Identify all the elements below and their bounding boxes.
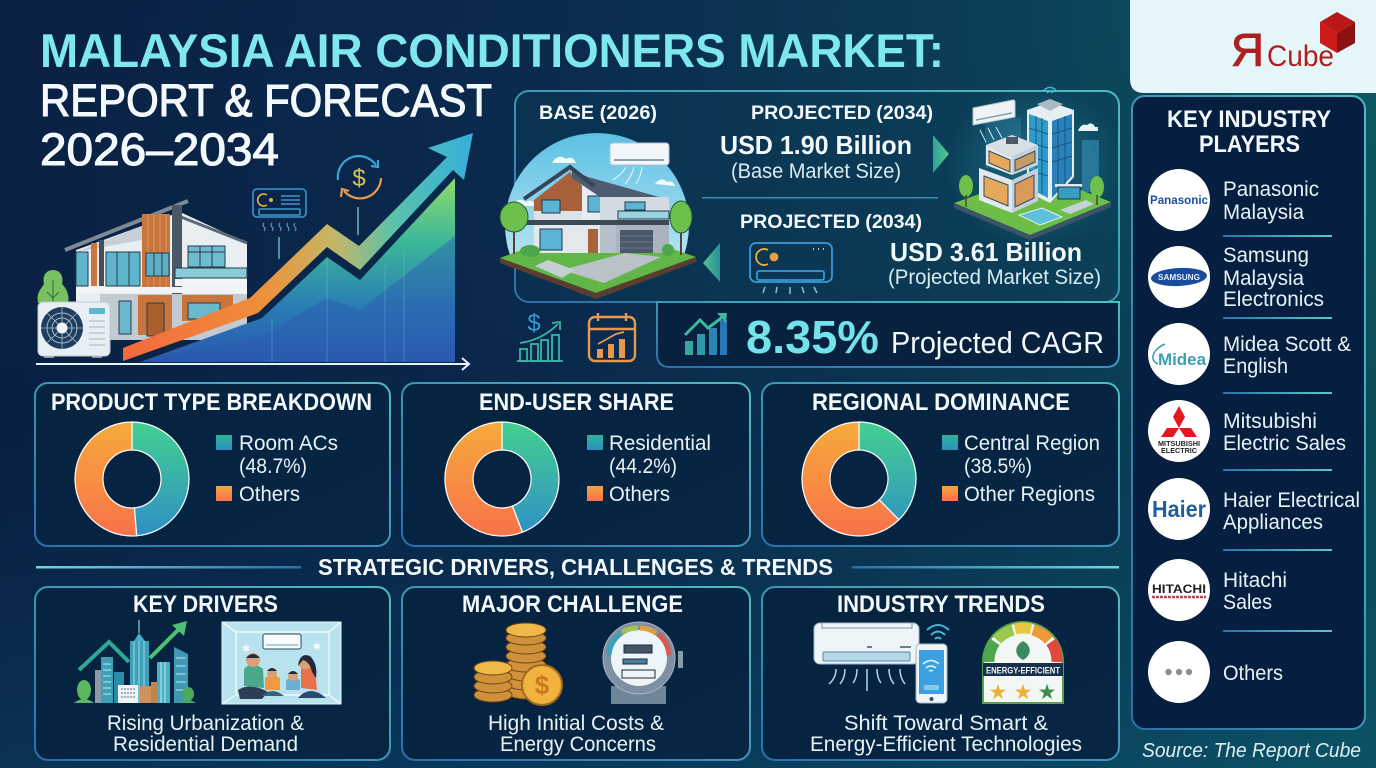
caption: High Initial Costs & — [488, 712, 664, 735]
caption: Energy Concerns — [500, 733, 656, 756]
player: Samsung — [1148, 244, 1324, 311]
player: Midea — [1148, 323, 1351, 385]
player: Samsung: Malaysia — [1223, 267, 1304, 290]
arrow left — [703, 243, 720, 282]
panel heading: KEY INDUSTRY — [1167, 106, 1331, 133]
player: Hitachi: Sales — [1223, 591, 1272, 614]
icon: wifi — [927, 625, 949, 639]
caption: Shift Toward Smart & — [844, 712, 1048, 735]
legend — [587, 432, 711, 506]
panel: end-user share: END-USER SHARE — [479, 389, 674, 416]
icon: house — [65, 201, 247, 340]
player: Mitsubishi: MITSUBISHI — [1158, 441, 1200, 448]
growth illustration: house and rising chart — [36, 133, 473, 370]
axis — [36, 358, 469, 370]
icon: energy efficiency badge — [983, 622, 1063, 704]
caption — [107, 712, 304, 756]
legend: Room ACs — [239, 432, 338, 455]
donut chart — [445, 422, 559, 536]
icon: calendar chart — [589, 313, 635, 361]
caption: Rising Urbanization & — [107, 712, 304, 735]
legend: (44.2%) — [609, 455, 677, 478]
CAGR label: Projected CAGR — [891, 325, 1104, 360]
legend — [942, 432, 1100, 506]
panel: key drivers: KEY DRIVERS — [133, 591, 278, 618]
panel: end-user share — [402, 383, 750, 546]
logo text: Cube — [1267, 40, 1334, 73]
icon: wall AC — [610, 143, 669, 184]
logo text: Я — [1231, 24, 1264, 76]
player: Panasonic: Panasonic — [1223, 178, 1319, 201]
player: Others: Others — [1223, 662, 1283, 685]
title: 2026–2034 — [40, 124, 279, 175]
icon: revenue growth — [517, 310, 563, 361]
caption: Residential Demand — [113, 733, 298, 756]
legend: Other Regions — [964, 483, 1095, 506]
player: Panasonic — [1148, 169, 1319, 231]
icon: AC unit — [750, 243, 832, 294]
player: Panasonic: Malaysia — [1223, 201, 1304, 224]
legend: (48.7%) — [239, 455, 307, 478]
player: Hitachi: Hitachi — [1223, 569, 1287, 592]
player: Mitsubishi: Electric Sales — [1223, 432, 1346, 455]
panel: industry trends — [762, 587, 1119, 760]
arrow right — [933, 135, 949, 173]
player: Haier: Appliances — [1223, 511, 1323, 534]
panel: product type breakdown: PRODUCT TYPE BREAKDOWN — [51, 389, 372, 416]
player: Hitachi: HITACHI — [1152, 584, 1206, 596]
icon: coin stacks — [474, 623, 562, 705]
section heading: STRATEGIC DRIVERS, CHALLENGES & TRENDS — [318, 554, 833, 580]
panel heading — [1167, 106, 1331, 158]
icon: energy efficiency badge: ENERGY-EFFICIENT — [986, 666, 1060, 676]
icon: dollar cycle: $ — [352, 165, 366, 192]
legend — [216, 432, 338, 506]
icon: city growth — [74, 620, 196, 703]
icon: AC with Malaysian motif — [253, 189, 306, 259]
player: Midea: Midea Scott & — [1223, 333, 1351, 356]
caption — [488, 712, 664, 756]
projected value: USD 3.61 Billion — [890, 237, 1082, 267]
logo text — [1231, 24, 1334, 76]
caption — [810, 712, 1082, 756]
player: Haier: Haier Electrical — [1223, 489, 1360, 512]
caption: Energy-Efficient Technologies — [810, 733, 1082, 756]
panel: regional dominance: REGIONAL DOMINANCE — [812, 389, 1070, 416]
legend: Others — [609, 483, 670, 506]
icon: CAGR chart — [685, 313, 727, 355]
icon: tree behind outdoor unit — [38, 270, 69, 303]
panel: regional dominance — [762, 383, 1119, 546]
player: Haier: Haier — [1152, 496, 1206, 522]
player: Mitsubishi — [1148, 400, 1346, 462]
icon: energy efficiency badge: ★ — [1014, 681, 1032, 704]
panel: key drivers — [35, 587, 390, 760]
illustration: commercial building — [945, 83, 1125, 247]
icon: energy efficiency badge: ★ — [1038, 681, 1056, 704]
player: Midea: English — [1223, 355, 1288, 378]
panel: major challenge — [402, 587, 750, 760]
CAGR value: 8.35% — [746, 311, 879, 363]
player: Samsung: SAMSUNG — [1158, 272, 1200, 282]
logo panel — [1130, 0, 1376, 93]
icon: energy efficiency badge: ★ — [989, 681, 1007, 704]
title: REPORT & FORECAST — [40, 75, 492, 126]
icon: smartphone — [916, 644, 947, 703]
title: MALAYSIA AIR CONDITIONERS MARKET: — [40, 24, 944, 77]
player: Samsung: Samsung — [1223, 244, 1309, 267]
icon: energy meter — [603, 622, 683, 704]
player: Midea: Midea — [1158, 350, 1207, 369]
rising arrow — [123, 133, 473, 361]
legend: Others — [239, 483, 300, 506]
panel heading: PLAYERS — [1199, 131, 1300, 158]
player: Haier — [1148, 478, 1360, 540]
base value — [720, 130, 912, 183]
icon: revenue growth: $ — [527, 310, 541, 337]
player: Others — [1148, 641, 1283, 703]
projected label: PROJECTED (2034) — [751, 103, 933, 124]
icon: outdoor AC unit — [38, 302, 110, 358]
legend: Central Region — [964, 432, 1100, 455]
icon: family in cool room: ✱ — [313, 642, 321, 653]
illustration: base house — [500, 133, 696, 317]
icon: coin stacks: $ — [535, 670, 550, 700]
projected value — [888, 237, 1101, 289]
panel: market size — [500, 83, 1125, 367]
player: Panasonic: Panasonic — [1150, 193, 1208, 207]
panel: major challenge: MAJOR CHALLENGE — [462, 591, 683, 618]
base value: (Base Market Size) — [731, 160, 901, 183]
icon: family in cool room: ✱ — [242, 644, 250, 655]
icon: cube — [1320, 12, 1355, 53]
base value: USD 1.90 Billion — [720, 130, 912, 160]
panel: key industry players — [1132, 96, 1365, 729]
player: Mitsubishi: ELECTRIC — [1161, 448, 1197, 455]
projected value: (Projected Market Size) — [888, 266, 1101, 289]
chart area — [140, 178, 455, 362]
icon: dollar cycle — [338, 156, 381, 235]
source: Source: The Report Cube — [1142, 740, 1361, 762]
legend: (38.5%) — [964, 455, 1032, 478]
donut chart — [802, 422, 916, 536]
panel: product type breakdown — [35, 383, 390, 546]
player: Hitachi — [1148, 559, 1287, 621]
projected label 2: PROJECTED (2034) — [740, 212, 922, 233]
panel: industry trends: INDUSTRY TRENDS — [837, 591, 1045, 618]
player: Samsung: Electronics — [1223, 288, 1324, 311]
icon: smart AC — [814, 623, 919, 691]
panel: CAGR strip — [657, 302, 1119, 367]
title — [40, 24, 944, 175]
player: Mitsubishi: Mitsubishi — [1223, 410, 1317, 433]
icon: family in cool room — [222, 622, 341, 704]
legend: Residential — [609, 432, 711, 455]
donut chart — [75, 422, 189, 536]
base label: BASE (2026) — [539, 103, 657, 124]
